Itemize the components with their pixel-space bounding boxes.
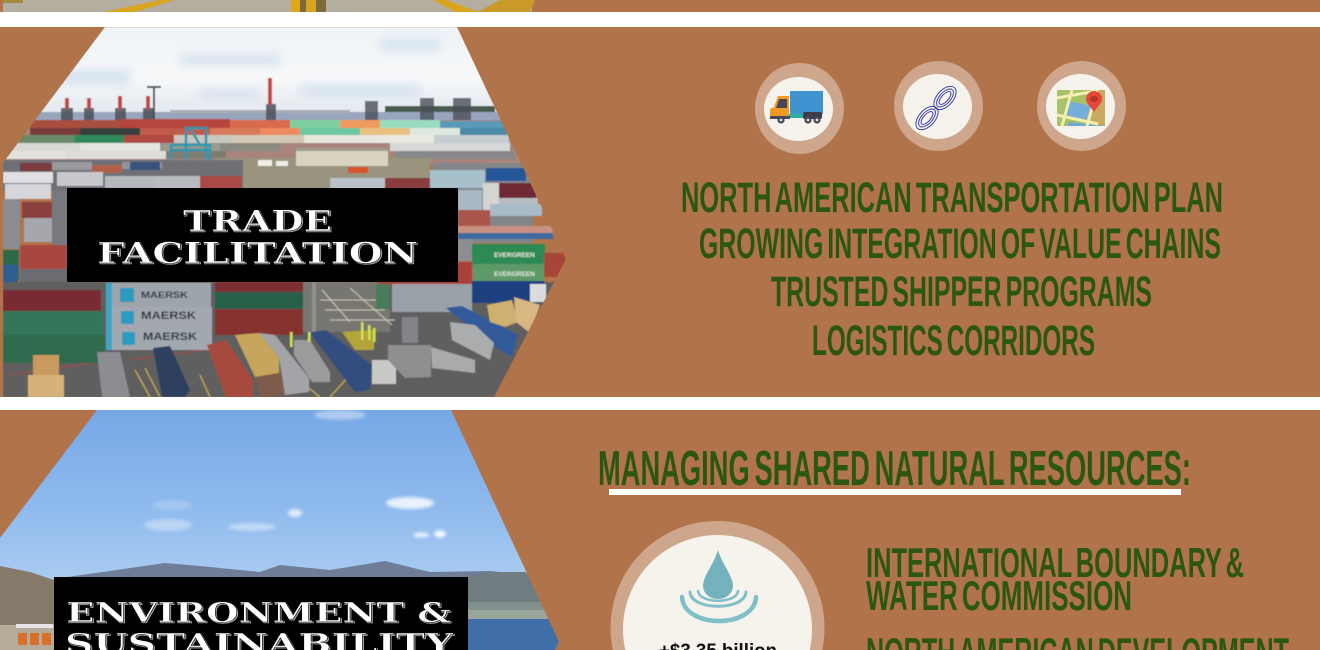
- icon: chain link: [894, 61, 983, 151]
- evergreen containers: EVERGREEN: [494, 252, 535, 259]
- yard ground: [3, 282, 563, 397]
- white building: [296, 148, 388, 166]
- mountains: [60, 561, 560, 625]
- title box: trade facilitation: [67, 188, 458, 282]
- resource agencies list: [866, 539, 1289, 650]
- stacked containers, back rows: [3, 160, 243, 190]
- title box: environment and sustainability: [54, 577, 468, 650]
- right stacks: [433, 163, 533, 243]
- maersk stacks: [106, 283, 212, 350]
- panel: top strip: [0, 0, 1320, 12]
- maersk stacks: MAERSK: [141, 310, 196, 322]
- water callout circle: [610, 521, 824, 650]
- icon: water drop: [682, 550, 756, 621]
- photo: road strip: [3, 0, 535, 12]
- title text: [65, 598, 454, 650]
- icon: truck: [755, 63, 844, 154]
- yard trailers: [28, 375, 64, 397]
- left stacks: [3, 290, 102, 312]
- resource agencies list: WATER COMMISSION: [866, 572, 1132, 619]
- title text: TRADE: [183, 204, 332, 238]
- blue gantry crane: [169, 126, 212, 161]
- evergreen containers: [472, 244, 566, 303]
- maersk stacks: MAERSK: [143, 331, 197, 343]
- trade facilitation list: LOGISTICS CORRIDORS: [812, 317, 1095, 365]
- left hillside: [0, 566, 54, 625]
- photo: reservoir and mountains: [0, 410, 570, 650]
- distant cranes: [60, 85, 472, 121]
- title text: FACILITATION: [97, 236, 418, 270]
- evergreen containers: EVERGREEN: [494, 271, 535, 278]
- dark red and green stacks: [214, 282, 304, 292]
- title text: [97, 204, 418, 270]
- photo: container port: [0, 27, 570, 397]
- maersk stacks: MAERSK: [141, 290, 189, 300]
- far container field: [3, 120, 563, 165]
- panel: environment and sustainability: [0, 410, 1320, 650]
- title text: ENVIRONMENT &: [66, 598, 451, 629]
- yard ground mid: [215, 158, 430, 190]
- icon: map pin: [1037, 61, 1126, 151]
- trade facilitation list: [681, 174, 1223, 365]
- panel: trade facilitation: [0, 27, 1320, 397]
